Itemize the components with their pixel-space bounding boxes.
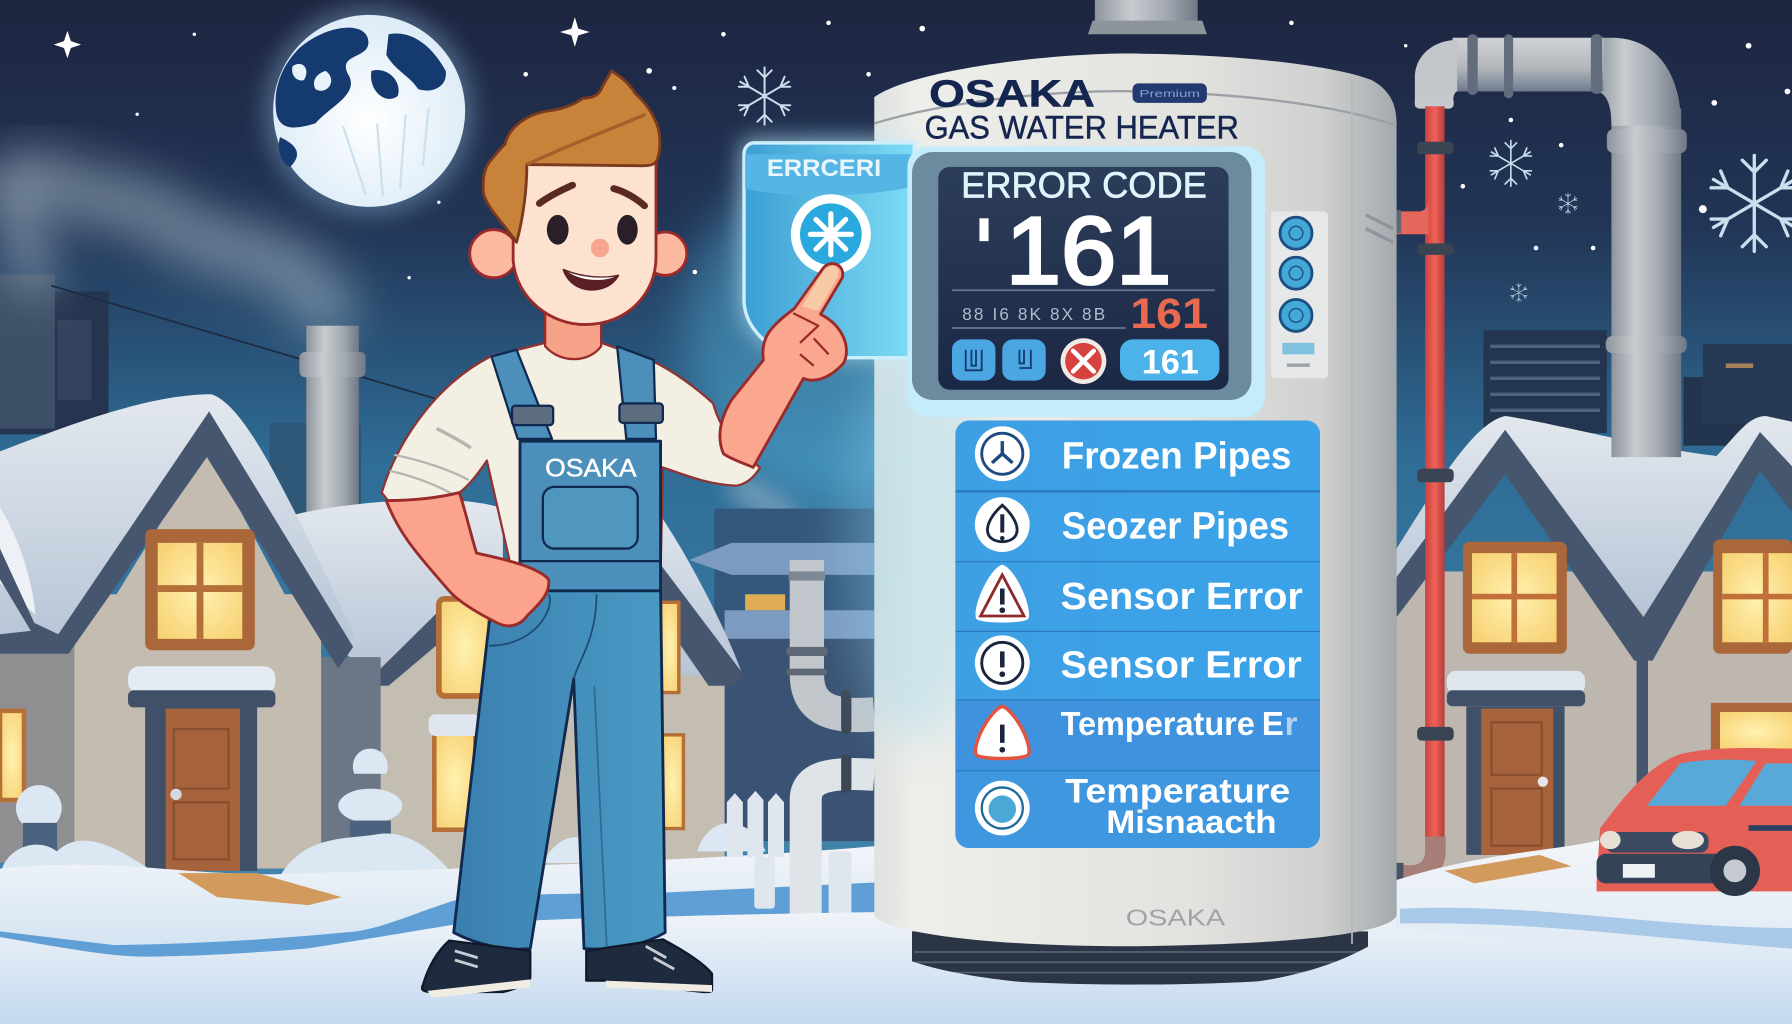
row: temperature error: r [1285, 706, 1298, 743]
base grille [912, 931, 1368, 985]
status row: 88 I6 8K 8X 8B [962, 304, 1105, 324]
smoke [0, 177, 326, 309]
shadow band [0, 869, 880, 966]
row: frozen pipes: Frozen Pipes [1062, 435, 1291, 477]
left arm with hand on hip [386, 493, 549, 626]
middle snowfield [0, 846, 880, 945]
row: temperature mismatch: Misnaacth [1106, 804, 1277, 840]
house: middle left [296, 500, 745, 869]
control buttons: 161 [1142, 344, 1199, 382]
snow in front of base [880, 928, 1397, 1024]
heater brand heading [925, 72, 1239, 145]
snow shrub and mounds [0, 749, 766, 886]
neck [545, 314, 601, 359]
right house window one [1463, 542, 1567, 654]
display panel [907, 146, 1265, 417]
row: temperature error [955, 701, 1320, 770]
right silver flue pipe [1415, 34, 1687, 457]
shoes [422, 939, 712, 998]
control buttons [952, 338, 1219, 384]
shirt [382, 343, 760, 571]
heater brand heading: Premium [1139, 89, 1200, 100]
freeze icon [791, 194, 871, 274]
house: left [0, 394, 354, 871]
heater brand heading: OSAKA [929, 72, 1095, 114]
row: temperature mismatch: Temperature [1065, 772, 1290, 810]
bib pocket [543, 487, 638, 549]
row: sensor error repeat [955, 632, 1320, 699]
right houses [1397, 416, 1792, 869]
bib label: OSAKA [545, 455, 637, 483]
mechanic character [382, 71, 846, 998]
status row [962, 290, 1208, 337]
row: temperature error: E [1262, 706, 1284, 743]
garden path [178, 873, 342, 905]
overall bib [491, 346, 663, 591]
picket fence [727, 791, 851, 920]
heater brand heading: GAS WATER HEATER [925, 109, 1239, 145]
row: temperature error: Temperature [1061, 706, 1255, 743]
error popup card: ERRCERI [767, 155, 881, 182]
trousers [454, 589, 665, 949]
right shadow band on snow [1400, 908, 1792, 949]
foreground snow [0, 912, 1792, 1024]
tank body [874, 54, 1397, 946]
red pipe [1390, 106, 1454, 886]
moon [264, 6, 474, 216]
left house door [128, 666, 275, 871]
eyebrows [539, 185, 645, 206]
ears [470, 230, 687, 278]
steam near pipe [731, 486, 807, 560]
right house window two [1713, 539, 1792, 654]
row: sensor error: Sensor Error [1061, 575, 1303, 617]
blue glow on tank [846, 331, 983, 743]
error popup card [742, 139, 914, 358]
stars [54, 17, 1790, 279]
large code: 161 [1006, 197, 1171, 304]
left chimney [299, 326, 366, 514]
row: sensor error [955, 562, 1320, 631]
row: sensor error repeat: Sensor Error [1061, 644, 1302, 686]
utility wires [51, 286, 440, 400]
mouth [563, 270, 618, 290]
snowflakes [739, 67, 1792, 302]
water heater tank [846, 0, 1397, 985]
status row: 161 [1130, 290, 1208, 337]
row: temperature mismatch [955, 771, 1320, 848]
left low pipes [786, 560, 874, 949]
side button panel [1271, 211, 1328, 378]
left house window [145, 529, 255, 650]
right foreground snow [1397, 840, 1792, 1024]
causes list [955, 421, 1320, 848]
distant buildings [0, 274, 1792, 514]
red car [1597, 748, 1792, 896]
hair [483, 71, 660, 242]
row: seozer pipes: Seozer Pipes [1062, 504, 1289, 546]
flue collar [1088, 0, 1207, 34]
nose [591, 239, 609, 257]
background building behind pipes [689, 509, 874, 841]
central glow [686, 160, 983, 503]
eyes [547, 215, 638, 245]
right arm pointing [720, 264, 846, 467]
row: seozer pipes [955, 493, 1320, 561]
error code heading: ERROR CODE [961, 165, 1207, 206]
row: frozen pipes [955, 421, 1320, 490]
right house door [1447, 671, 1585, 855]
tank brand label: OSAKA [1126, 905, 1226, 931]
face [513, 160, 656, 325]
